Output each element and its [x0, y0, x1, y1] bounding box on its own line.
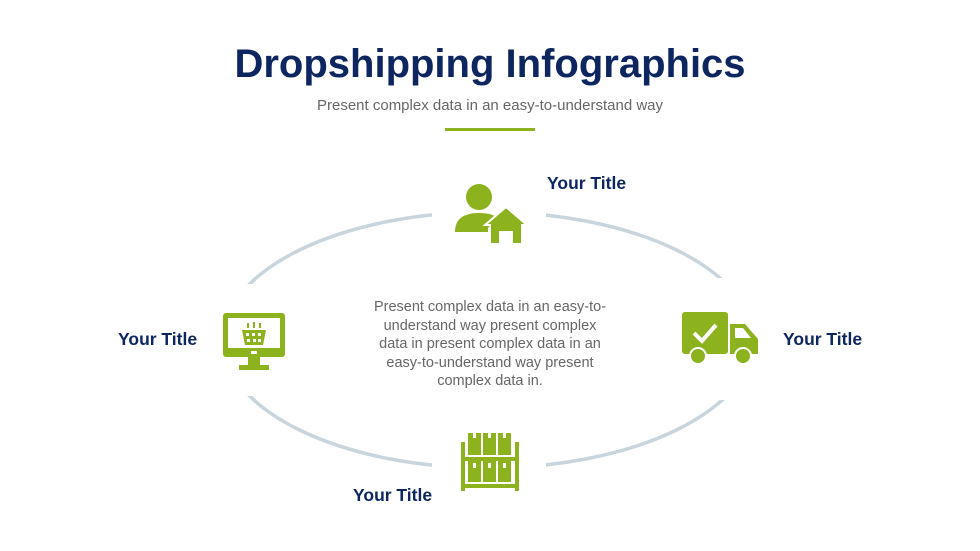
center text [374, 299, 606, 389]
underline accent [445, 128, 535, 131]
heading: bottom: Your Title [353, 485, 432, 505]
icon: shelf with boxes [461, 433, 519, 491]
center text: easy-to-understand way present [386, 354, 594, 370]
center text: complex data in. [437, 373, 543, 389]
icon: computer with basket [223, 313, 285, 370]
icon: delivery truck [682, 312, 758, 363]
heading: left: Your Title [118, 329, 197, 349]
icon: person with house [455, 184, 524, 243]
center text: Present complex data in an easy-to- [374, 299, 606, 315]
center text: understand way present complex [384, 318, 596, 334]
title: Dropshipping Infographics [234, 42, 746, 86]
heading: top: Your Title [547, 173, 626, 193]
center text: data in present complex data in an [379, 336, 601, 352]
heading: right: Your Title [783, 329, 862, 349]
subtitle: Present complex data in an easy-to-understand way [317, 97, 663, 114]
